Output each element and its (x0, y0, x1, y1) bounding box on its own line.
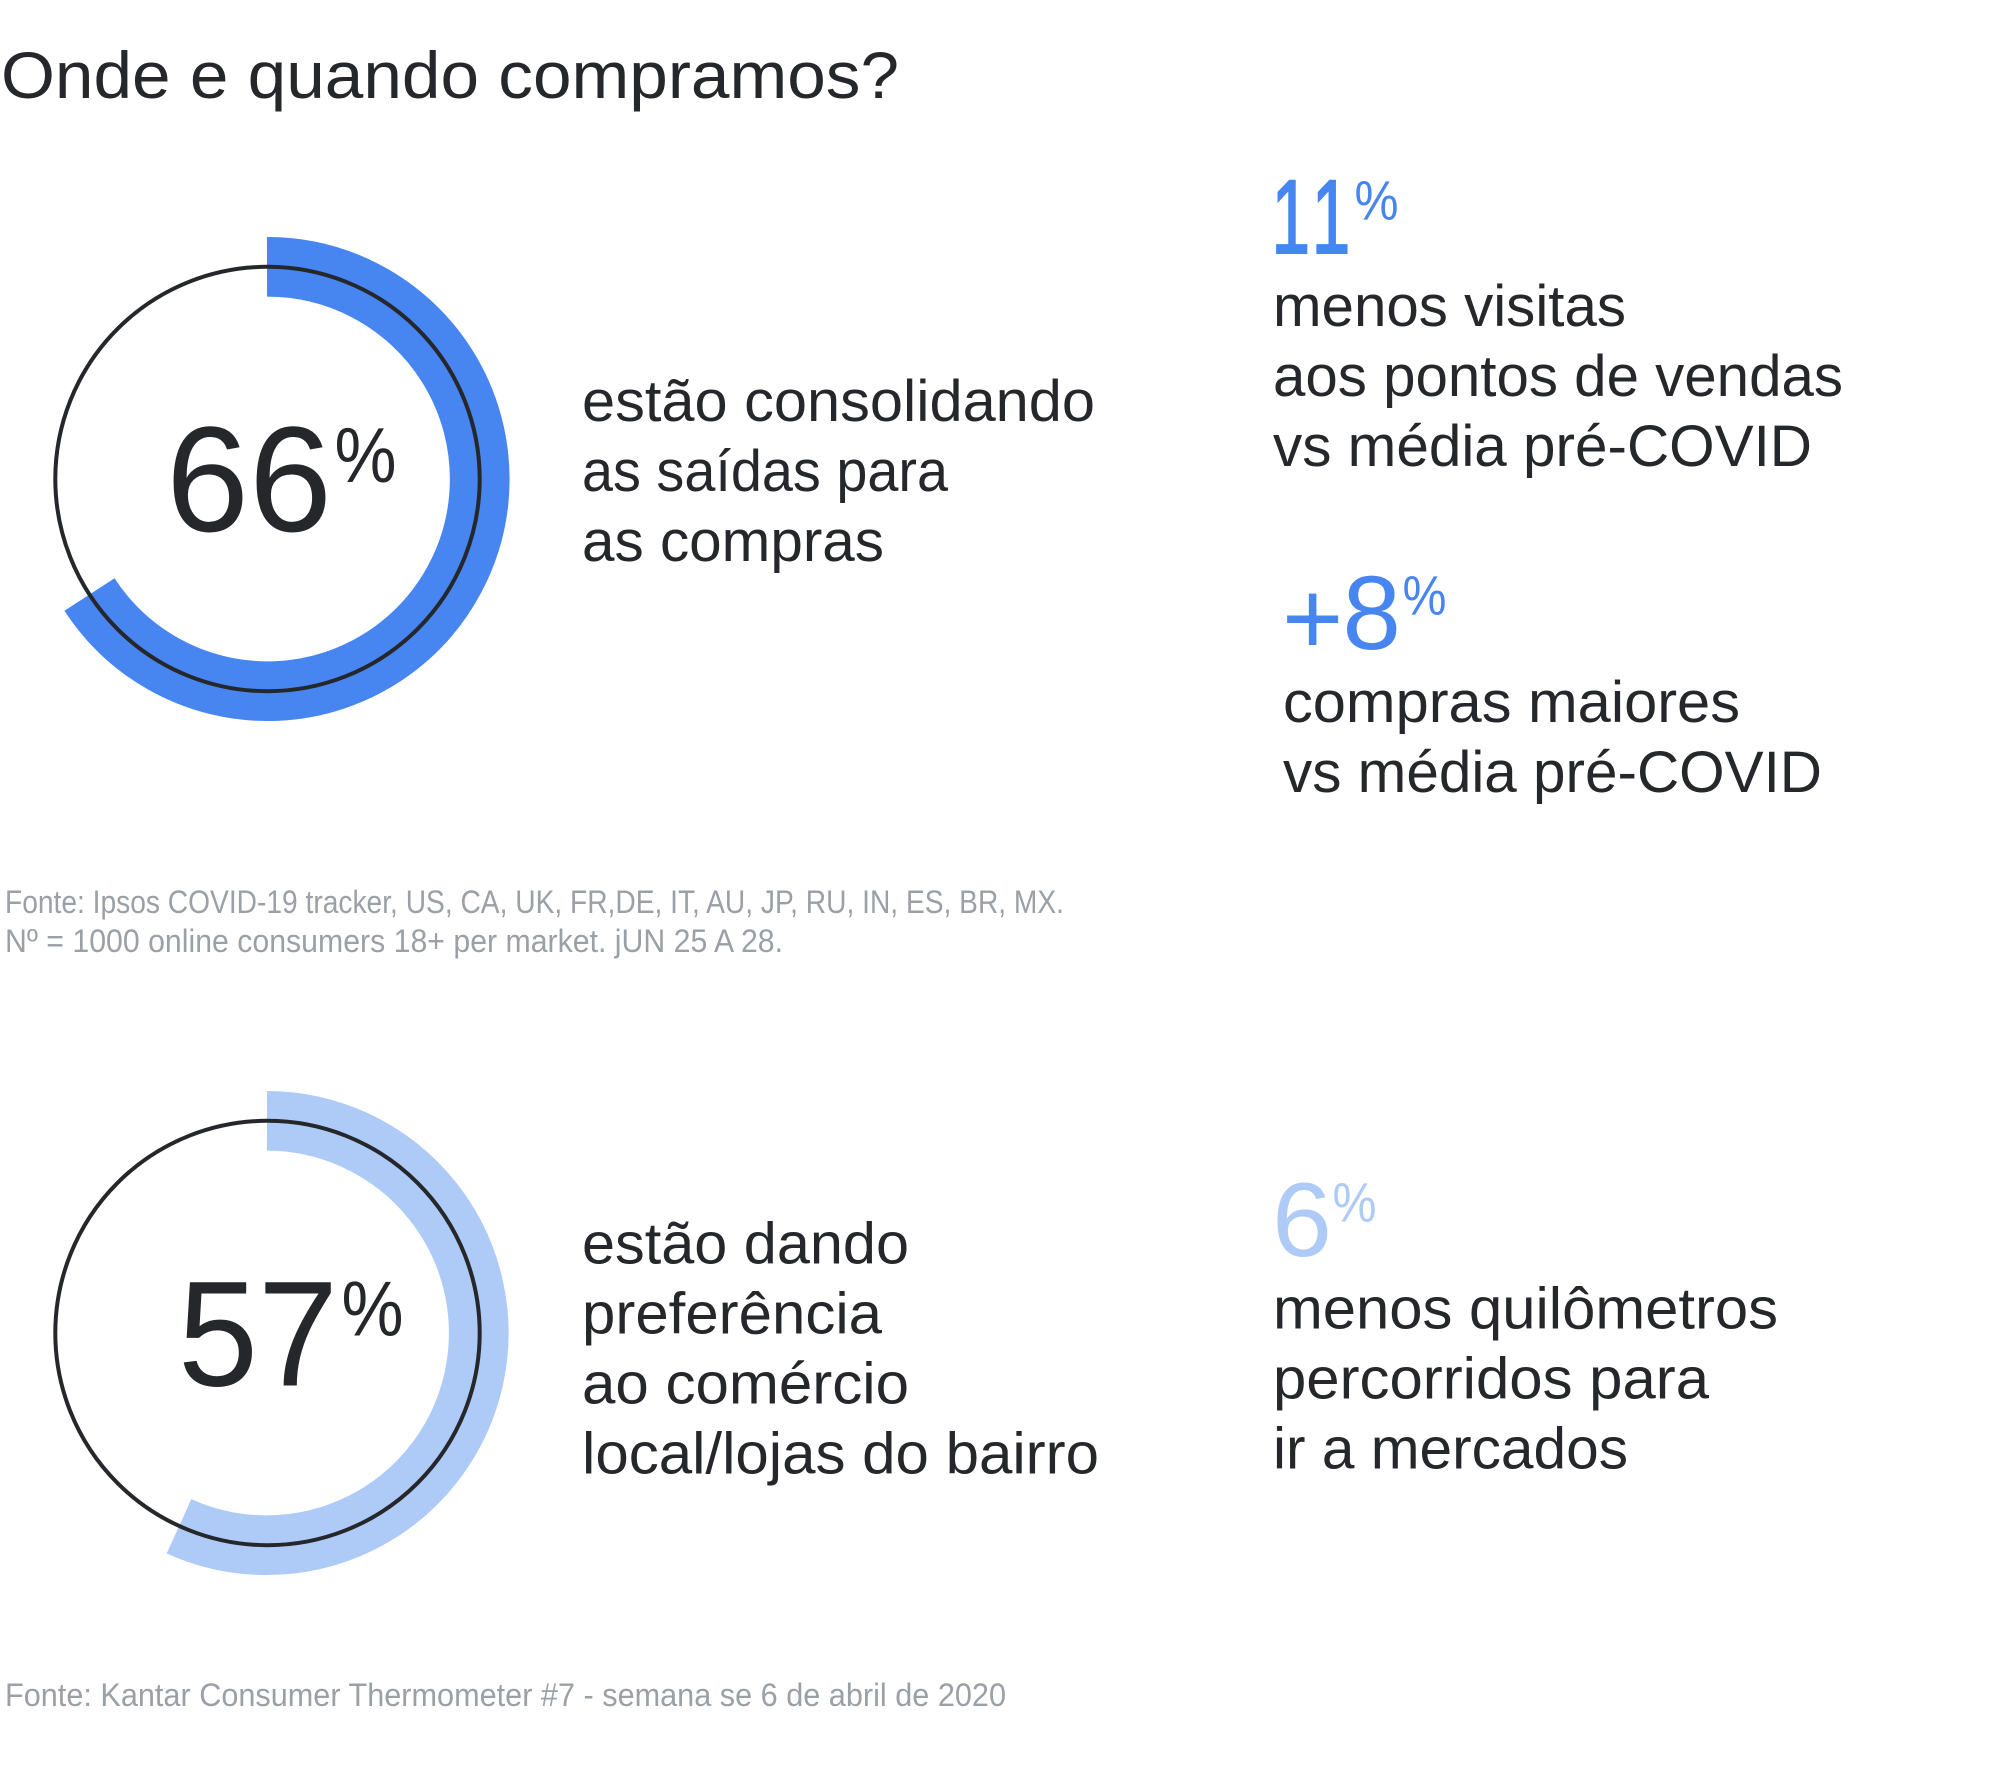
source: Ipsos: Fonte: Ipsos COVID-19 tracker, US, CA, UK, FR,DE, IT, AU, JP, RU, IN, ES, BR, MX. (5, 884, 1064, 920)
stat: 11% fewer visits (1272, 157, 1843, 479)
stat: +8% larger purchases: vs média pré-COVID (1283, 740, 1822, 805)
source: Ipsos (5, 884, 1064, 959)
stat: 11% fewer visits: vs média pré-COVID (1273, 414, 1812, 479)
text block: local preference: preferência (582, 1282, 883, 1346)
source: Kantar: Fonte: Kantar Consumer Thermometer #7 - semana se 6 de abril de 2020 (5, 1677, 1006, 1713)
source: Ipsos: Nº = 1000 online consumers 18+ per market. jUN 25 A 28. (5, 923, 783, 959)
stat: 6% fewer kilometres (1272, 1162, 1778, 1482)
stat: 11% fewer visits: menos visitas (1273, 274, 1626, 339)
panel: 66% donut chart (55, 267, 480, 691)
text block: consolidating trips (582, 369, 1095, 574)
stat: 6% fewer kilometres: ir a mercados (1273, 1416, 1628, 1482)
text block: consolidating trips: as saídas para (582, 439, 949, 504)
stat: 6% fewer kilometres: percorridos para (1273, 1346, 1710, 1412)
text block: local preference: local/lojas do bairro (582, 1422, 1099, 1486)
value: 66%: 66 (166, 395, 332, 563)
donut arc: 66% (90, 267, 480, 691)
text block: consolidating trips: estão consolidando (582, 369, 1095, 434)
panel: 57% donut chart (55, 1121, 480, 1545)
stat: +8% larger purchases: +8 (1282, 555, 1401, 677)
value: 57%: % (342, 1264, 404, 1352)
stat: 11% fewer visits: % (1354, 168, 1398, 232)
stat: +8% larger purchases (1282, 555, 1822, 805)
stat: 11% fewer visits: 11 (1272, 157, 1350, 275)
donut outline circle (55, 1121, 480, 1545)
stat: 11% fewer visits: aos pontos de vendas (1273, 344, 1843, 409)
stat: 6% fewer kilometres: 6 (1272, 1162, 1332, 1279)
title: Onde e quando compramos? (1, 38, 899, 112)
text block: local preference: ao comércio (582, 1352, 909, 1416)
donut outline circle (55, 267, 480, 691)
value: 57%: 57 (178, 1250, 338, 1418)
stat: 6% fewer kilometres: menos quilômetros (1273, 1276, 1778, 1342)
text block: consolidating trips: as compras (582, 509, 884, 574)
text block: local preference (582, 1212, 1099, 1486)
stat: 6% fewer kilometres: % (1332, 1170, 1376, 1234)
donut arc: 57% (179, 1121, 479, 1545)
stat: +8% larger purchases: compras maiores (1283, 670, 1740, 735)
text block: local preference: estão dando (582, 1212, 909, 1276)
value: 66%: % (334, 411, 396, 499)
stat: +8% larger purchases: % (1402, 564, 1446, 626)
